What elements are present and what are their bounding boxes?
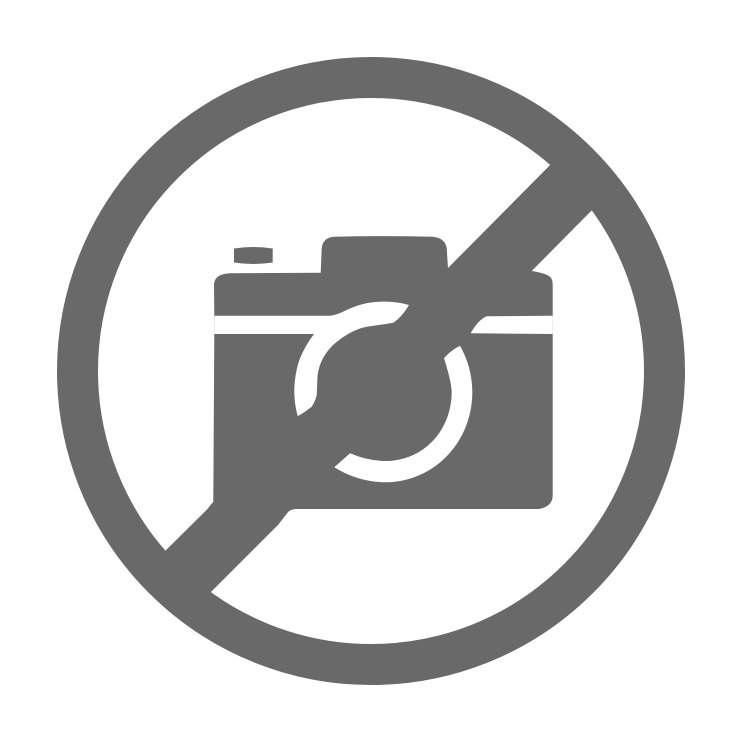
camera: right light stripe [471,316,553,334]
camera: right lens arc [334,346,472,482]
prohibition ring [78,78,664,664]
camera: left light stripe and lens arc [214,302,409,416]
camera: flash button [234,247,273,264]
camera body merged with diagonal slash [156,155,602,602]
